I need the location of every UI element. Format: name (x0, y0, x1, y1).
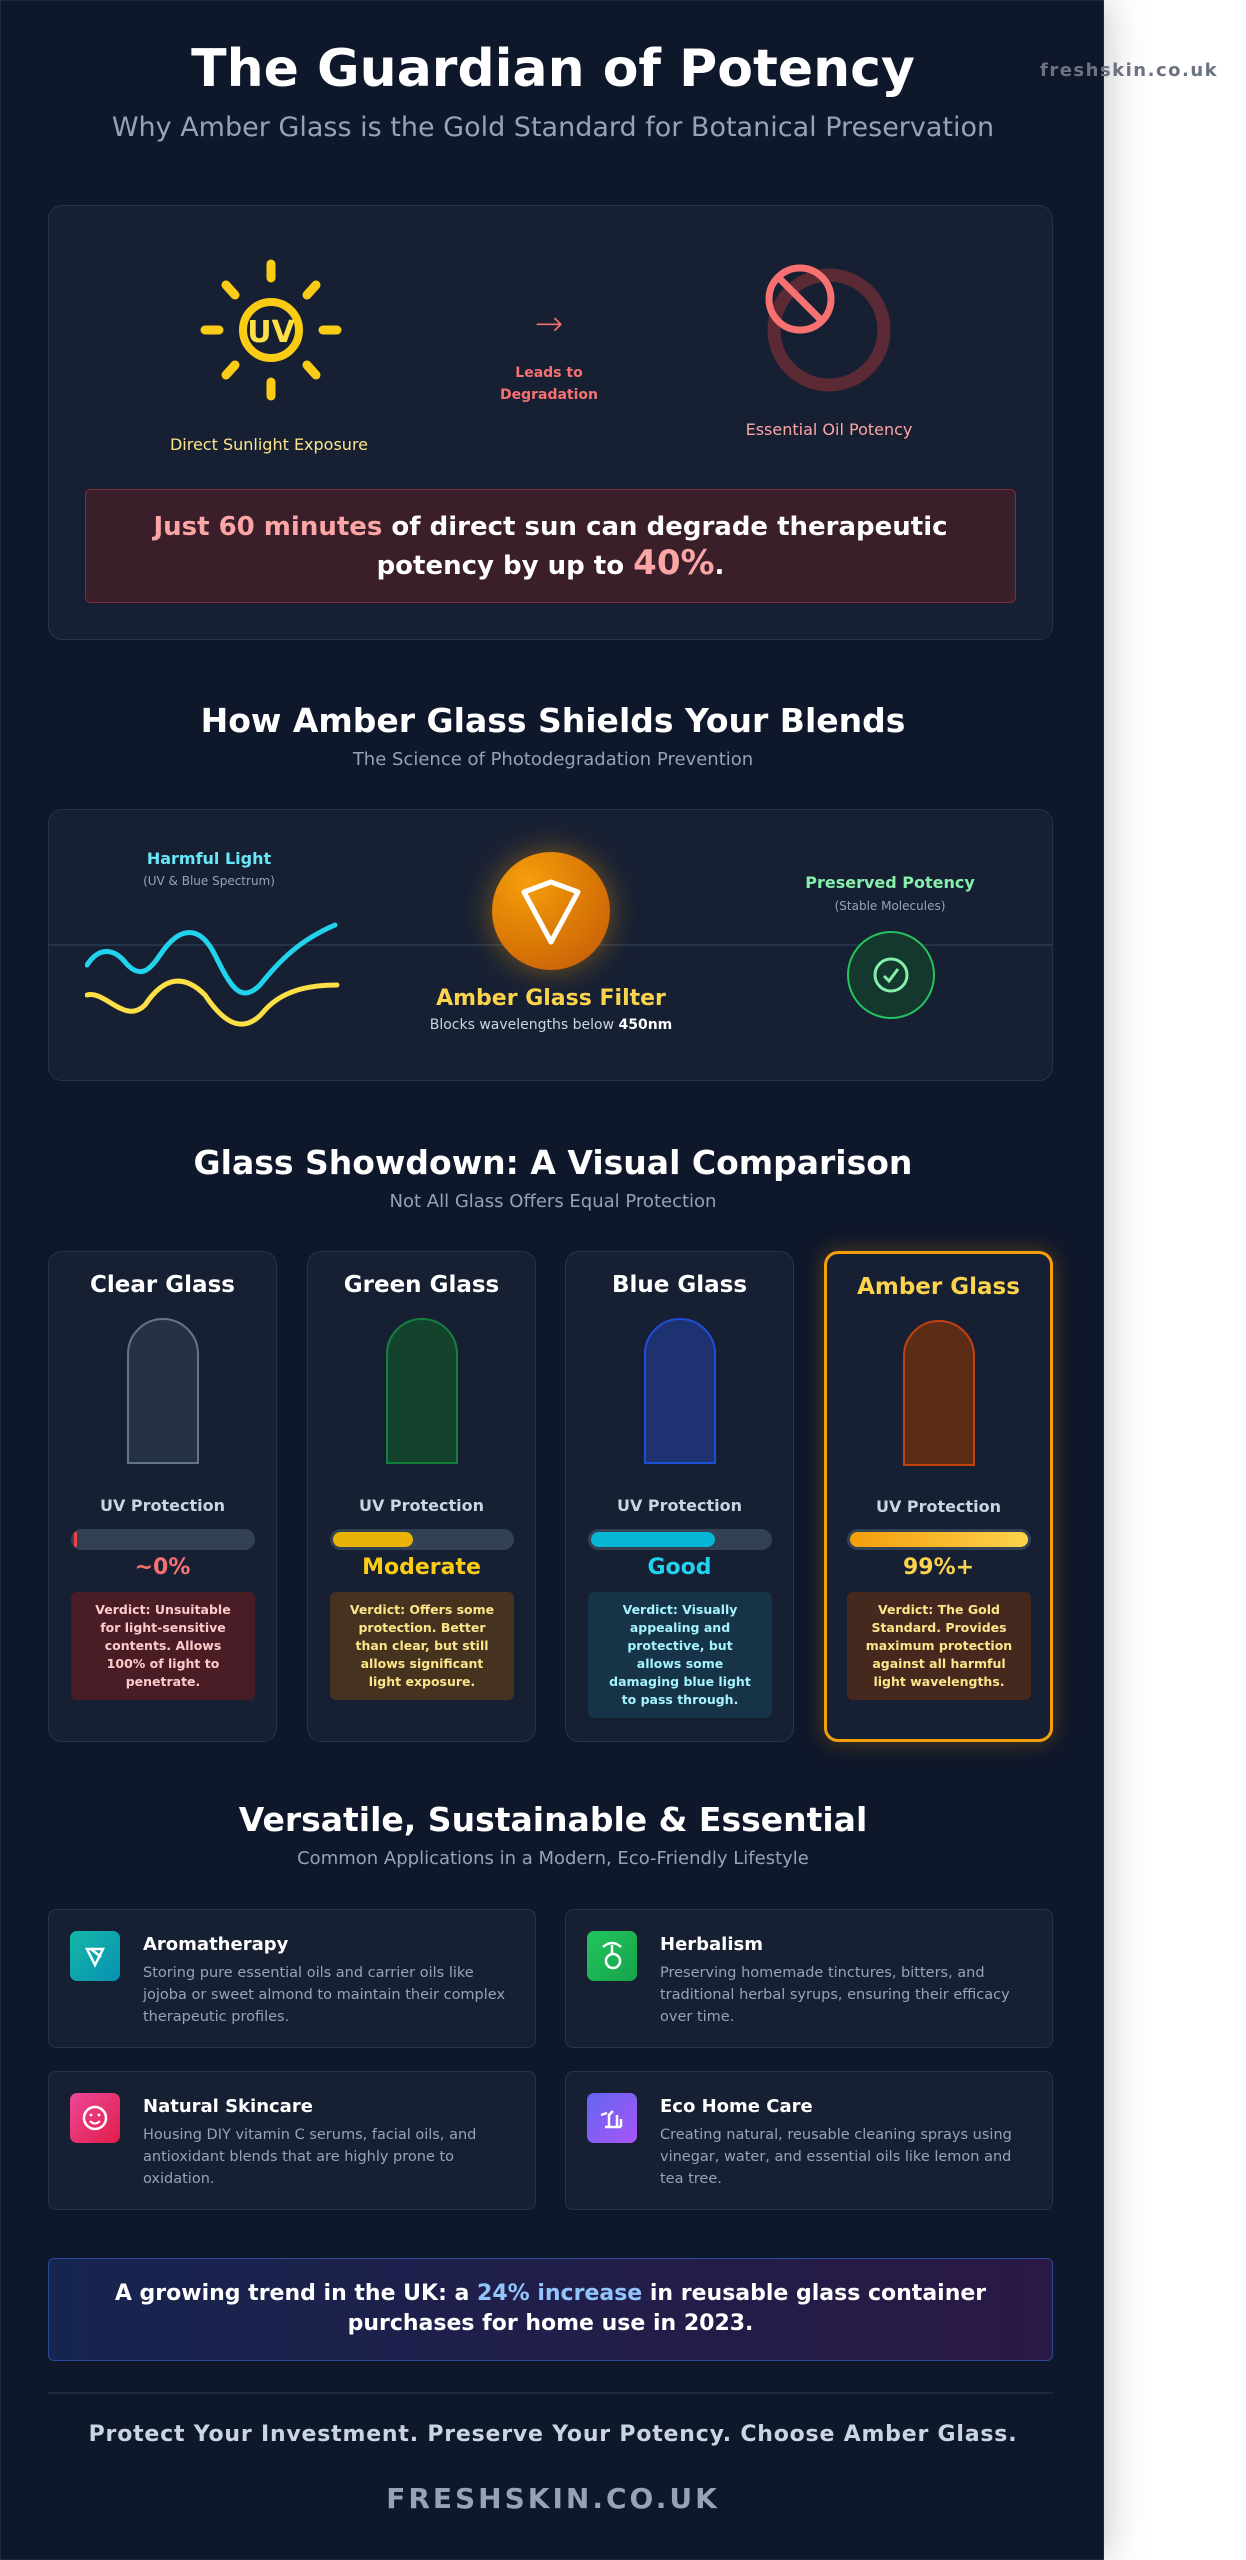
subtitle: Why Amber Glass is the Gold Standard for Botanical Preservation (112, 112, 994, 143)
icon: herb (587, 1931, 637, 1981)
panel: green glass: Green Glass (344, 1272, 499, 1298)
panel: natural skincare: Natural Skincare (143, 2096, 313, 2117)
icon: spray (587, 2093, 637, 2143)
subheading: science: The Science of Photodegradation Prevention (353, 749, 753, 770)
icon: smile (70, 2093, 120, 2143)
panel: amber glass: Amber Glass (857, 1274, 1020, 1300)
icon: UV sun: UV (247, 315, 296, 350)
tagline: Protect Your Investment. Preserve Your Potency. Choose Amber Glass. (89, 2422, 1017, 2447)
panel: amber filter: Blocks wavelengths below 450nm (430, 1017, 672, 1033)
icon: UV sun (200, 260, 342, 400)
panel: green glass: Moderate (362, 1555, 481, 1580)
callout: UK trend (48, 2258, 1053, 2361)
icon: amber orb (492, 852, 610, 970)
panel: aromatherapy: Storing pure essential oils and carrier oils like jojoba or sweet almond to maintain their complex therapeutic profiles. (143, 1965, 505, 2025)
panel: aromatherapy (48, 1909, 536, 2048)
panel: amber filter: (Stable Molecules) (835, 899, 945, 913)
label: leads to degradation: Degradation (500, 387, 598, 403)
panel: green glass: Verdict: Offers some protection. Better than clear, but still allows significant light exposure. (350, 1602, 494, 1689)
heading: shields: How Amber Glass Shields Your Blends (201, 701, 905, 740)
panel: blue glass: Verdict: Visually appealing and protective, but allows some damaging blue light to pass through. (609, 1602, 751, 1707)
panel: clear glass: Verdict: Unsuitable for light-sensitive contents. Allows 100% of light to penetrate. (95, 1602, 231, 1689)
label: harmful light: Harmful Light (147, 849, 271, 868)
panel: eco home care: Eco Home Care (660, 2096, 813, 2117)
callout: 60 minutes: potency by up to 40%. (377, 543, 724, 583)
panel: aromatherapy: Aromatherapy (143, 1934, 288, 1955)
panel: green glass (307, 1251, 536, 1742)
panel: amber glass: Verdict: The Gold Standard. Provides maximum protection against all harmful light wavelengths. (866, 1602, 1012, 1689)
panel: herbalism: Herbalism (660, 1934, 763, 1955)
panel: clear glass: UV Protection (100, 1496, 225, 1515)
heading: showdown: Glass Showdown: A Visual Comparison (194, 1143, 912, 1182)
heading: versatile: Versatile, Sustainable & Essential (239, 1800, 867, 1839)
panel: amber filter (48, 809, 1053, 1081)
panel: natural skincare (48, 2071, 536, 2210)
title: The Guardian of Potency (191, 39, 915, 99)
panel: clear glass: ~0% (135, 1555, 190, 1580)
watermark: freshskin.co.uk (1040, 60, 1218, 81)
footer brand: FRESHSKIN.CO.UK (386, 2482, 720, 2515)
panel: sunlight degradation (48, 205, 1053, 640)
panel: green glass: UV Protection (359, 1496, 484, 1515)
panel: blue glass: Blue Glass (612, 1272, 747, 1298)
icon: droplet (70, 1931, 120, 1981)
callout: UK trend: purchases for home use in 2023. (348, 2311, 753, 2336)
panel: amber glass (824, 1251, 1053, 1742)
panel: herbalism (565, 1909, 1053, 2048)
panel: eco home care (565, 2071, 1053, 2210)
panel: amber filter: (UV & Blue Spectrum) (143, 874, 275, 888)
panel: amber glass: UV Protection (876, 1497, 1001, 1516)
divider line (49, 944, 1052, 946)
label: leads to degradation: Leads to (515, 365, 583, 381)
panel: blue glass (565, 1251, 794, 1742)
chart: light waves (85, 922, 340, 1027)
callout: 60 minutes: Just 60 minutes of direct sun can degrade therapeutic (153, 512, 948, 542)
panel: natural skincare: Housing DIY vitamin C serums, facial oils, and antioxidant blends that are highly prone to oxidation. (143, 2127, 476, 2187)
panel: clear glass: Clear Glass (90, 1272, 235, 1298)
label: amber glass filter: Amber Glass Filter (436, 986, 666, 1011)
icon: check circle (847, 931, 935, 1019)
icon: potency prohibited (766, 264, 890, 392)
panel: eco home care: Creating natural, reusable cleaning sprays using vinegar, water, and essential oils like lemon and tea tree. (660, 2127, 1012, 2187)
panel: blue glass: Good (647, 1555, 712, 1580)
panel: amber glass: 99%+ (903, 1555, 974, 1580)
divider (48, 2392, 1053, 2394)
panel: herbalism: Preserving homemade tinctures, bitters, and traditional herbal syrups, ensuring their efficacy over time. (660, 1965, 1010, 2025)
label: direct sunlight: Direct Sunlight Exposure (170, 435, 368, 454)
subheading: Common Applications in a Modern, Eco-Friendly Lifestyle (297, 1848, 809, 1869)
panel: clear glass (48, 1251, 277, 1742)
callout: 60 minutes (85, 489, 1016, 603)
label: preserved potency: Preserved Potency (805, 873, 975, 892)
panel: blue glass: UV Protection (617, 1496, 742, 1515)
label: leads to degradation (500, 365, 598, 403)
callout: UK trend: A growing trend in the UK: a 24% increase in reusable glass container (115, 2281, 986, 2306)
subheading: Not All Glass Offers Equal Protection (390, 1191, 716, 1212)
arrow: → (535, 304, 563, 344)
label: essential oil potency: Essential Oil Potency (746, 420, 912, 439)
